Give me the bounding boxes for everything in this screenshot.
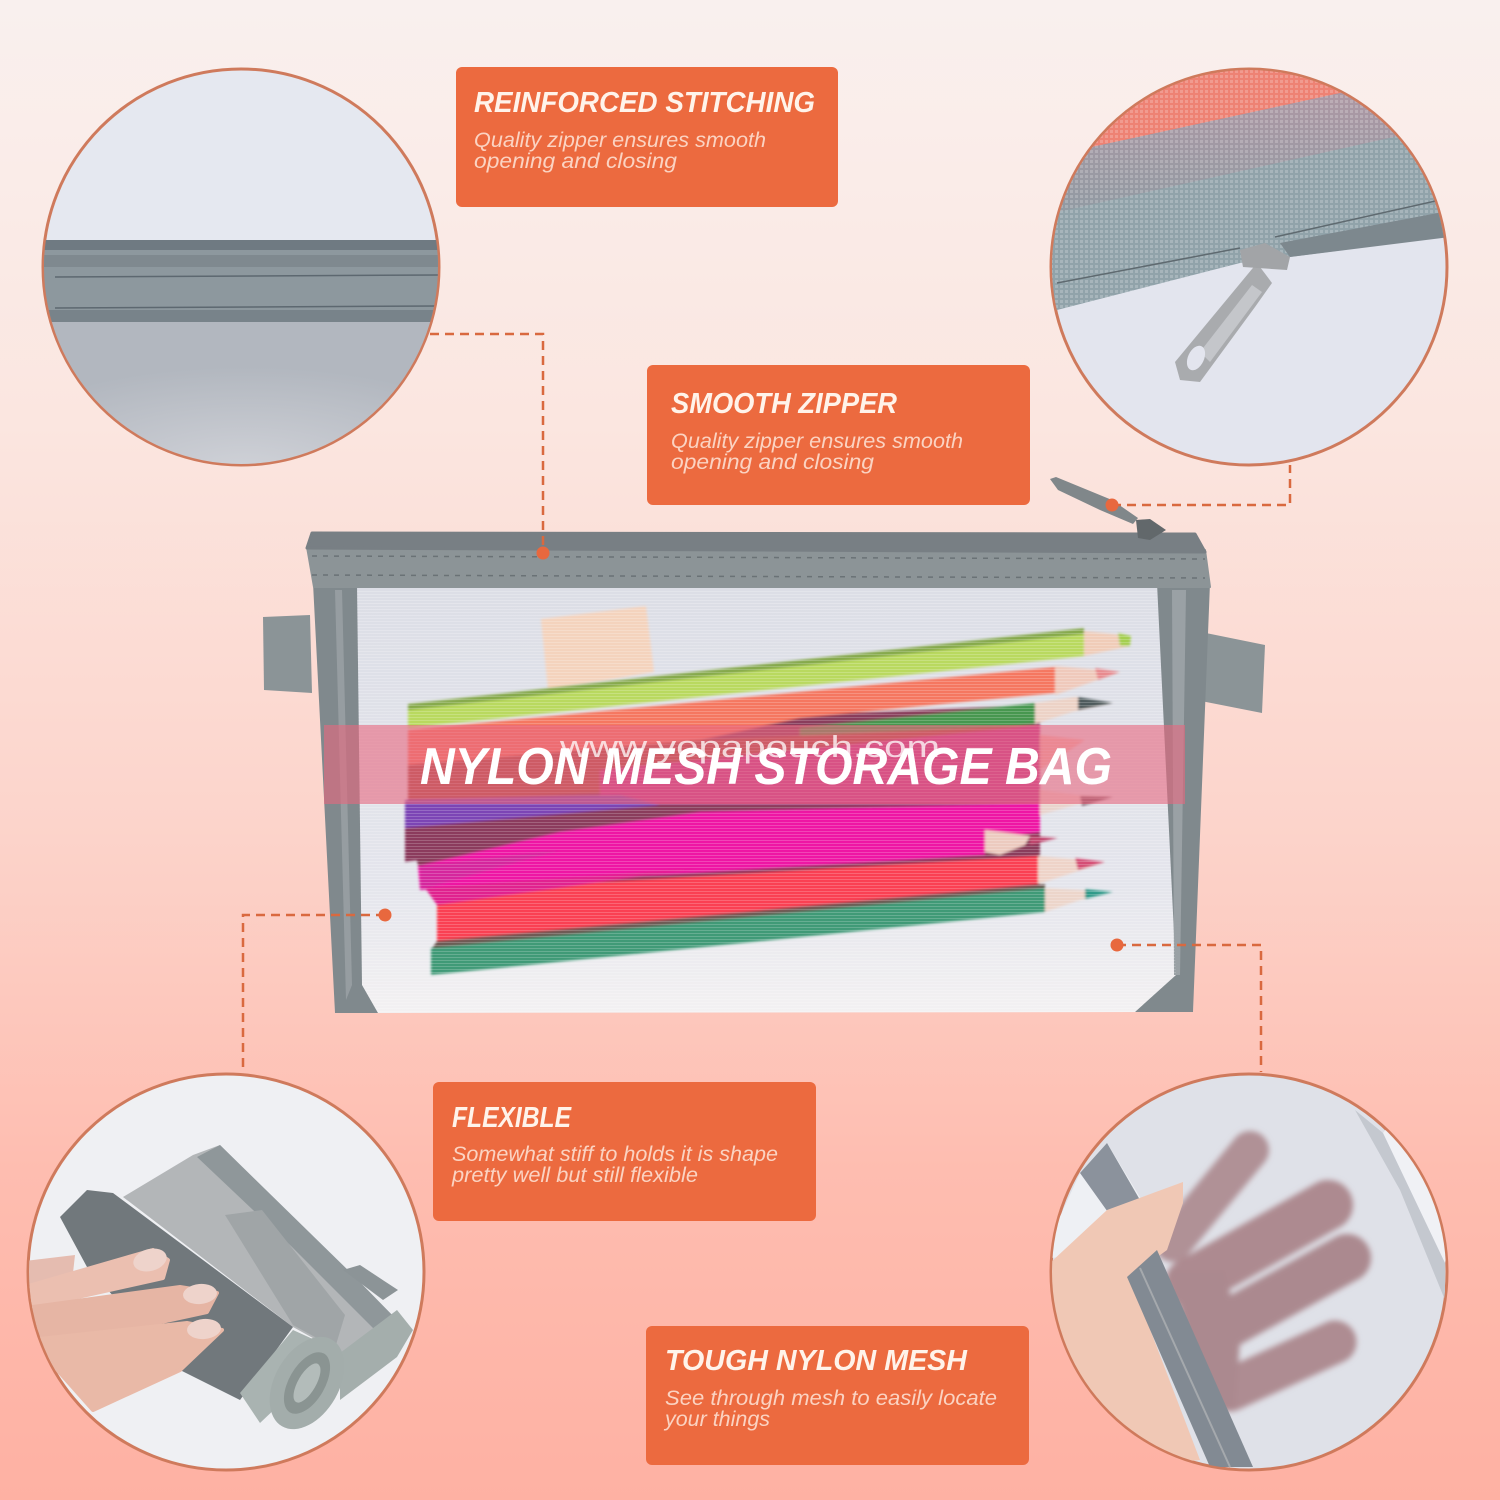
callout: reinforced stitching [456, 67, 838, 207]
pencils [405, 628, 1131, 975]
callout heading: FLEXIBLE [452, 1102, 572, 1134]
photo circle: hand behind mesh [1040, 1074, 1460, 1470]
callout: smooth zipper [647, 365, 1030, 505]
photo circle: rolled bag [25, 1074, 424, 1470]
photo circle: stitching close-up [40, 69, 450, 472]
side tabs [263, 615, 1265, 713]
callout: flexible [433, 1082, 816, 1221]
callout heading: TOUGH NYLON MESH [665, 1345, 968, 1377]
eraser [541, 606, 654, 690]
callout body: Quality zipper ensures smooth [671, 430, 963, 453]
callout body: your things [663, 1408, 770, 1431]
product: mesh bag with pencils [263, 477, 1265, 1013]
callout heading: SMOOTH ZIPPER [671, 388, 897, 420]
title: NYLON MESH STORAGE BAG [420, 738, 1112, 796]
photo circle: zipper close-up [1040, 60, 1460, 465]
zipper pull [1050, 477, 1166, 540]
callout body: opening and closing [671, 451, 874, 474]
callout body: Quality zipper ensures smooth [474, 129, 766, 152]
callout heading: REINFORCED STITCHING [474, 87, 815, 119]
connector: flexible callout to bag [243, 908, 392, 1073]
connector: stitching callout to bag [430, 334, 550, 560]
connector: zipper callout to bag [1106, 465, 1290, 512]
bag top zipper band [307, 533, 1210, 587]
callout: tough nylon mesh [646, 1326, 1029, 1465]
callout body: Somewhat stiff to holds it is shape [452, 1143, 778, 1166]
connector: tough mesh callout to bag [1110, 938, 1261, 1072]
callout body: opening and closing [474, 150, 677, 173]
bag body [313, 583, 1210, 1013]
callout body: pretty well but still flexible [451, 1164, 698, 1187]
mesh texture overlay [357, 590, 1176, 1013]
title banner [324, 725, 1185, 804]
watermark: www.yopapouch.com [559, 729, 940, 764]
callout body: See through mesh to easily locate [665, 1387, 997, 1410]
